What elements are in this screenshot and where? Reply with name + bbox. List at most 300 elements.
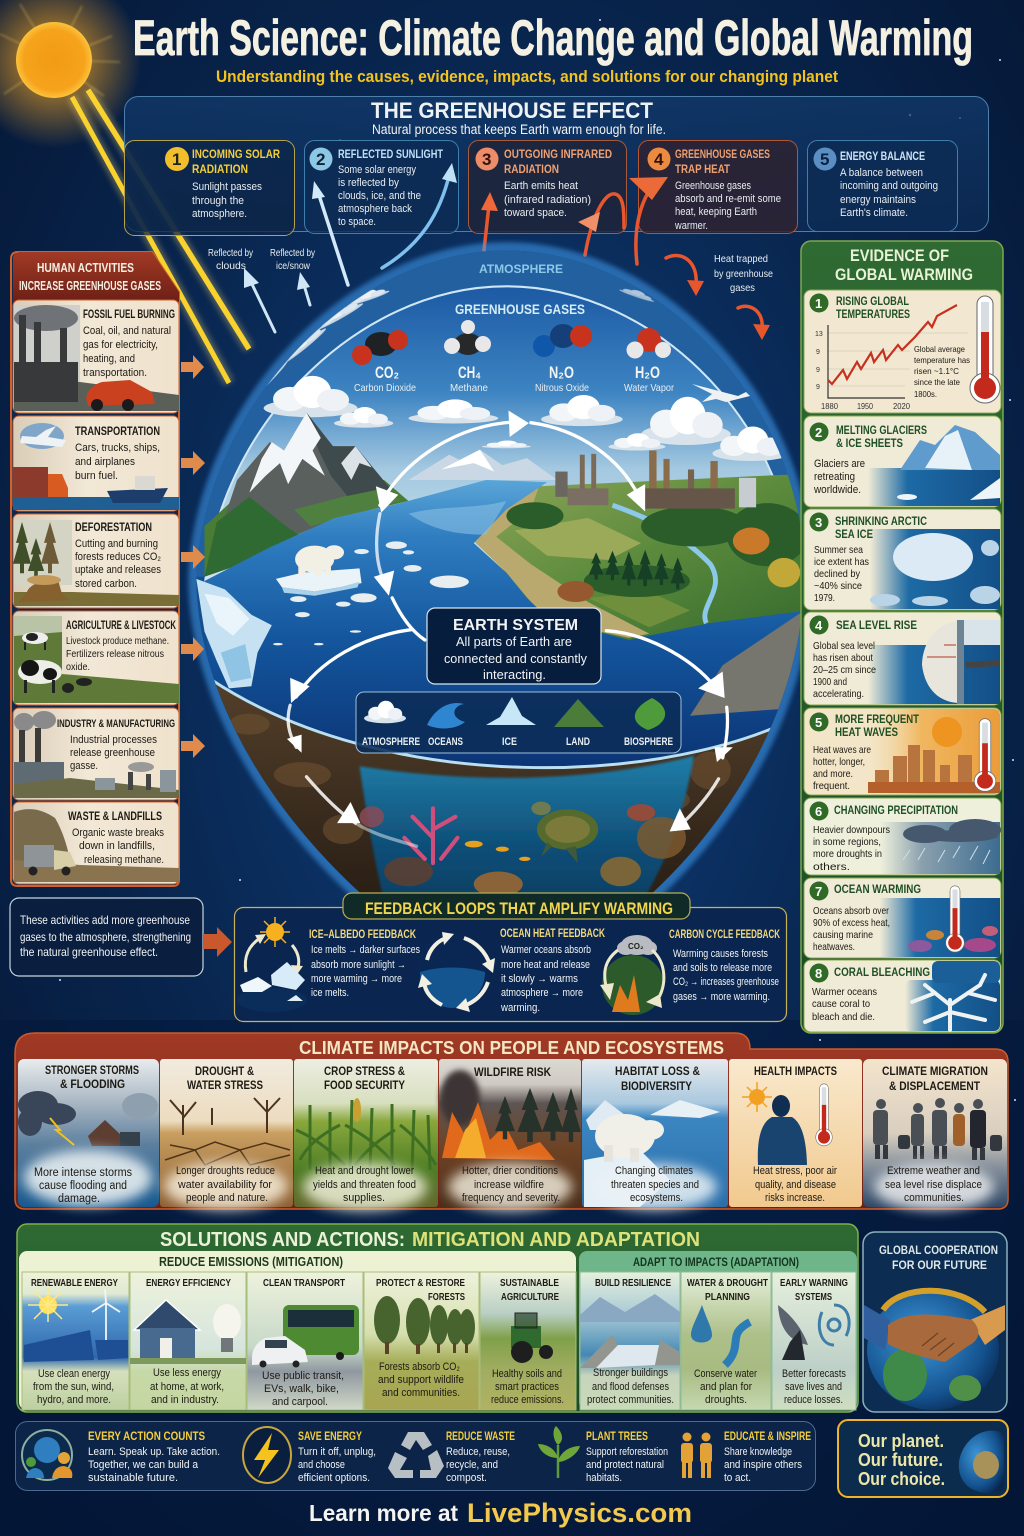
card: sustainable agriculture: Healthy soils and	[492, 1368, 562, 1380]
molecule: methane: CH₄	[458, 363, 481, 382]
card: crop stress and food security: supplies.	[343, 1192, 385, 1204]
panel: global cooperation: FOR OUR FUTURE	[892, 1258, 987, 1272]
card: water and drought planning: PLANNING	[705, 1291, 750, 1303]
card: protect and restore forests: and support wildlife	[378, 1374, 464, 1386]
text: plant trees: Support reforestation	[586, 1446, 668, 1458]
card: melting glaciers: Glaciers are	[814, 458, 865, 470]
chart: temperature line: 1880	[821, 401, 838, 411]
molecule: nitrous oxide	[533, 324, 592, 394]
card: energy efficiency: and in industry.	[151, 1394, 219, 1406]
text: every action counts: Learn. Speak up. Take action.	[88, 1446, 220, 1458]
step 2: reflected sunlight	[310, 147, 444, 228]
card: coral bleaching: CORAL BLEACHING	[834, 967, 930, 979]
legend labels: OCEANS	[428, 736, 463, 748]
card: climate migration and displacement: communities.	[904, 1192, 964, 1204]
card: industry and manufacturing: gasse.	[70, 760, 98, 772]
card: changing precipitation: others.	[813, 861, 850, 873]
step 3: outgoing infrared radiation: RADIATION	[504, 162, 559, 176]
card: more frequent heat waves: MORE FREQUENT	[835, 714, 919, 726]
text: plant trees: and protect natural	[586, 1459, 664, 1471]
card: wildfire risk: frequency and severity.	[462, 1192, 560, 1204]
card: drought and water stress: DROUGHT &	[195, 1064, 254, 1078]
panel: every action counts strip: PLANT TREES	[586, 1429, 648, 1443]
card: build resilience: and flood defenses	[592, 1381, 669, 1393]
text: ice-albedo: more warming → more	[311, 973, 402, 985]
callout: earth system: All parts of Earth are	[456, 635, 572, 649]
step 4: greenhouse gases trap heat: heat, keeping Earth	[675, 206, 757, 218]
labels: reflected and trapped heat: Reflected by	[270, 247, 316, 259]
card: fossil fuel burning: gas for electricity,	[83, 339, 158, 351]
step 5: energy balance: 5	[820, 150, 829, 169]
card: rising global temperatures: 1800s.	[914, 389, 937, 399]
step 5: energy balance	[814, 148, 938, 219]
panel: feedback loops: FEEDBACK LOOPS THAT AMPLIFY WARMING	[365, 899, 673, 918]
text: ocean heat: warming.	[500, 1002, 540, 1014]
card: fossil fuel burning	[13, 300, 179, 413]
card: changing precipitation: 6	[815, 804, 822, 819]
card: agriculture and livestock: Livestock produce methane.	[66, 635, 169, 647]
chart: temperature line: 9	[816, 384, 820, 391]
card: wildfire risk: increase wildfire	[474, 1179, 544, 1191]
card: clean transport: CLEAN TRANSPORT	[263, 1277, 345, 1289]
callout: activities strengthen greenhouse effect: gases to the atmosphere, strengthening	[20, 930, 191, 944]
step 2: reflected sunlight: is reflected by	[338, 177, 399, 189]
card: health impacts: Heat stress, poor air	[753, 1165, 837, 1177]
card: ocean warming: Oceans absorb over	[813, 905, 889, 917]
card: ocean warming: 90% of excess heat,	[813, 917, 890, 929]
molecule: methane: Methane	[450, 382, 488, 394]
card: renewable energy: from the sun, wind,	[33, 1381, 114, 1393]
chart: temperature line: 1950	[857, 401, 873, 411]
card: early warning systems: SYSTEMS	[795, 1291, 832, 1303]
card: shrinking arctic sea ice: SEA ICE	[835, 529, 873, 541]
icon: carbon cycle	[600, 935, 664, 1015]
card: shrinking arctic sea ice: declined by	[814, 568, 861, 580]
card: coral bleaching: 8	[815, 966, 822, 981]
block: adapt to impacts: ADAPT TO IMPACTS (ADAPTATION)	[633, 1255, 799, 1269]
card: renewable energy: hydro, and more.	[37, 1394, 111, 1406]
panel: evidence of global warming: EVIDENCE OF	[850, 247, 949, 265]
chart: temperature line: 9	[816, 367, 820, 374]
card: protect and restore forests: PROTECT & RESTORE	[376, 1277, 465, 1289]
panel: solutions and actions: MITIGATION AND ADAPTATION	[412, 1229, 700, 1251]
arrows: reflected sunlight and infrared	[244, 163, 770, 340]
callout: activities strengthen greenhouse effect: These activities add more greenhouse	[20, 913, 190, 927]
panel: feedback loops: ICE–ALBEDO FEEDBACK	[309, 927, 416, 941]
step 2: reflected sunlight: 2	[316, 150, 325, 169]
chart: temperature line: 13	[815, 331, 823, 338]
molecule: carbon dioxide: Carbon Dioxide	[354, 382, 416, 394]
text: ocean heat	[500, 944, 591, 1014]
card: melting glaciers: & ICE SHEETS	[836, 438, 903, 450]
card: sustainable agriculture: smart practices	[495, 1381, 559, 1393]
card: climate migration and displacement: & DISPLACEMENT	[889, 1079, 981, 1093]
greenhouse gases: molecules: GREENHOUSE GASES	[455, 301, 585, 317]
text: reduce waste	[446, 1446, 510, 1484]
molecule: carbon dioxide: CO₂	[375, 363, 399, 382]
card: renewable energy: Use clean energy	[38, 1368, 110, 1380]
text: ocean heat: more heat and release	[501, 959, 590, 971]
card: habitat loss and biodiversity: ecosystems.	[630, 1192, 683, 1204]
card: rising global temperatures: Global average	[914, 344, 965, 354]
card: waste and landfills: WASTE & LANDFILLS	[68, 811, 162, 823]
block: adapt to impacts	[579, 1251, 857, 1410]
card: early warning systems: Better forecasts	[782, 1368, 846, 1380]
step 4: greenhouse gases trap heat: absorb and re-emit some	[675, 193, 781, 205]
card: more frequent heat waves: 5	[815, 715, 822, 730]
card: agriculture and livestock	[13, 611, 179, 705]
icon: sprout	[538, 1426, 580, 1478]
card: energy efficiency: Use less energy	[153, 1367, 221, 1379]
step 1: incoming solar radiation: RADIATION	[192, 162, 248, 176]
card: rising global temperatures: temperature has	[914, 355, 970, 365]
card: climate migration and displacement: Extreme weather and	[887, 1165, 980, 1177]
text: save energy: Turn it off, unplug,	[298, 1446, 376, 1458]
card: melting glaciers: retreating	[814, 471, 855, 483]
card: drought and water stress: water availability for	[177, 1179, 272, 1191]
arrow: to feedback loops	[203, 927, 232, 957]
card: early warning systems	[772, 1272, 856, 1410]
legend labels: LAND	[566, 736, 590, 748]
panel: evidence of global warming: GLOBAL WARMING	[835, 266, 973, 284]
card: crop stress and food security: yields and threaten food	[313, 1179, 416, 1191]
step 1: incoming solar radiation: 1	[172, 150, 181, 169]
step 4: greenhouse gases trap heat	[648, 147, 781, 232]
card: ocean warming: OCEAN WARMING	[834, 884, 921, 896]
card: health impacts: risks increase.	[765, 1192, 825, 1204]
molecule: water vapor	[624, 328, 674, 394]
text: reduce waste: compost.	[446, 1472, 487, 1484]
step 5: energy balance: Earth's climate.	[840, 207, 908, 219]
icon: small globe	[959, 1431, 1004, 1493]
card: shrinking arctic sea ice: 3	[815, 515, 822, 530]
block: reduce emissions: REDUCE EMISSIONS (MITIGATION)	[159, 1254, 343, 1269]
card: early warning systems: EARLY WARNING	[780, 1277, 848, 1289]
step 3: outgoing infrared radiation: 3	[482, 150, 491, 169]
card: drought and water stress: Longer droughts reduce	[176, 1165, 275, 1177]
card: deforestation	[13, 514, 179, 608]
callout: earth system	[427, 608, 601, 684]
legend: earth system spheres	[356, 692, 681, 753]
card: wildfire risk: Hotter, drier conditions	[462, 1165, 558, 1177]
card: sea level rise: Global sea level	[813, 640, 875, 652]
text: educate and inspire: Share knowledge	[724, 1446, 792, 1458]
card: stronger storms and flooding: & FLOODING	[60, 1077, 125, 1091]
text: every action counts: sustainable future.	[88, 1472, 178, 1484]
footer: learn more	[309, 1498, 692, 1528]
legend labels: BIOSPHERE	[624, 736, 673, 748]
card: early warning systems: save lives and	[785, 1381, 842, 1393]
text: carbon cycle: gases → more warming.	[673, 991, 770, 1003]
card: sustainable agriculture: reduce emissions.	[491, 1394, 564, 1406]
card: fossil fuel burning: Coal, oil, and natural	[83, 325, 171, 337]
callout: our planet: Our future.	[858, 1450, 943, 1470]
text: plant trees	[586, 1446, 668, 1484]
labels: reflected and trapped heat	[208, 247, 773, 294]
text: carbon cycle	[673, 948, 779, 1003]
footer: learn more: LivePhysics.com	[467, 1498, 692, 1528]
panel: every action counts strip: EVERY ACTION COUNTS	[88, 1429, 205, 1443]
card: protect and restore forests: and communities.	[382, 1387, 460, 1399]
card: sea level rise: 20–25 cm since	[813, 664, 876, 676]
card: melting glaciers	[804, 416, 1001, 507]
icon: carbon cycle: CO₂	[628, 942, 644, 951]
step 2: reflected sunlight: REFLECTED SUNLIGHT	[338, 147, 444, 161]
card: build resilience: protect communities.	[587, 1394, 674, 1406]
card: habitat loss and biodiversity: threaten species and	[611, 1179, 699, 1191]
card: waste and landfills: down in landfills,	[79, 840, 155, 852]
card: rising global temperatures: risen ~1.1°C	[914, 366, 959, 376]
card: build resilience: Stronger buildings	[593, 1367, 668, 1379]
footer: learn more: Learn more at	[309, 1500, 458, 1526]
card: renewable energy	[22, 1272, 129, 1410]
text: reduce waste: recycle, and	[446, 1459, 498, 1471]
card: more frequent heat waves: HEAT WAVES	[835, 727, 898, 739]
text: educate and inspire: and inspire others	[724, 1459, 802, 1471]
text: save energy: efficient options.	[298, 1472, 370, 1484]
arrows: activities into atmosphere	[181, 355, 205, 758]
card: clean transport	[247, 1272, 363, 1410]
sun	[0, 0, 142, 148]
card: sustainable agriculture: SUSTAINABLE	[500, 1277, 559, 1289]
panel: feedback loops: OCEAN HEAT FEEDBACK	[500, 926, 605, 940]
card: rising global temperatures: TEMPERATURES	[836, 309, 910, 321]
card: drought and water stress: WATER STRESS	[187, 1078, 263, 1092]
labels: reflected and trapped heat: clouds	[216, 260, 246, 272]
card: coral bleaching	[804, 960, 1001, 1032]
card: fossil fuel burning: heating, and	[83, 353, 135, 365]
chart: temperature line: 2020	[893, 401, 910, 411]
panel: climate impacts: CLIMATE IMPACTS ON PEOPLE AND ECOSYSTEMS	[299, 1038, 724, 1058]
card: melting glaciers: 2	[815, 425, 822, 440]
text: every action counts	[88, 1446, 220, 1484]
card: clean transport: and carpool.	[272, 1396, 328, 1408]
step 2: reflected sunlight: to space.	[338, 216, 376, 228]
callout: earth system: connected and constantly	[444, 652, 588, 666]
card: more frequent heat waves: hotter, longer,	[813, 756, 865, 768]
card: melting glaciers: worldwide.	[813, 484, 861, 496]
card: agriculture and livestock: AGRICULTURE & LIVESTOCK	[66, 620, 176, 632]
card: more frequent heat waves	[804, 708, 1001, 795]
card: changing precipitation: more droughts in	[813, 848, 882, 860]
card: build resilience	[580, 1272, 680, 1410]
card: transportation: and airplanes	[75, 456, 135, 468]
card: sea level rise	[804, 612, 1001, 705]
icon: ocean heat cycle	[418, 932, 495, 1012]
card: deforestation: uptake and releases	[75, 564, 161, 576]
molecule: carbon dioxide	[352, 330, 416, 394]
text: reduce waste: Reduce, reuse,	[446, 1446, 510, 1458]
callout: activities strengthen greenhouse effect	[10, 898, 203, 976]
legend labels	[362, 736, 673, 748]
step 2: reflected sunlight: Some solar energy	[338, 164, 416, 176]
card: crop stress and food security	[294, 1059, 438, 1211]
legend labels: ICE	[502, 736, 517, 748]
heading: the greenhouse effect	[371, 98, 666, 137]
text: save energy	[298, 1446, 376, 1484]
icon: land	[554, 699, 604, 727]
callout: earth system: interacting.	[483, 668, 546, 682]
molecule: water vapor: Water Vapor	[624, 382, 674, 394]
card: renewable energy: RENEWABLE ENERGY	[31, 1277, 118, 1289]
card: crop stress and food security: FOOD SECURITY	[324, 1078, 405, 1092]
card: stronger storms and flooding	[18, 1059, 159, 1207]
step 4: greenhouse gases trap heat: 4	[654, 150, 664, 169]
card: sea level rise: 4	[815, 618, 823, 633]
callout: activities strengthen greenhouse effect: the natural greenhouse effect.	[20, 945, 158, 959]
card: agriculture and livestock: Fertilizers release nitrous	[66, 648, 164, 660]
card: ocean warming: heatwaves.	[813, 941, 855, 953]
labels: reflected and trapped heat: ice/snow	[276, 260, 310, 272]
labels: reflected and trapped heat: Reflected by	[208, 247, 254, 259]
panel: human activities	[11, 252, 179, 886]
card: protect and restore forests: Forests absorb CO₂	[379, 1361, 460, 1373]
card: transportation: TRANSPORTATION	[75, 424, 160, 438]
card: sea level rise: accelerating.	[813, 688, 864, 700]
card: health impacts: HEALTH IMPACTS	[754, 1064, 837, 1078]
block: reduce emissions	[19, 1251, 576, 1410]
card: drought and water stress: people and nature.	[186, 1192, 268, 1204]
text: carbon cycle: and soils to release more	[673, 962, 772, 974]
step 3: outgoing infrared radiation: OUTGOING INFRARED	[504, 147, 612, 161]
card: coral bleaching: cause coral to	[812, 998, 870, 1010]
card: waste and landfills	[13, 802, 179, 884]
card: ocean warming: 7	[815, 884, 822, 899]
icon: oceans	[427, 703, 465, 728]
card: deforestation: DEFORESTATION	[75, 520, 152, 534]
card: changing precipitation: in some regions,	[813, 836, 881, 848]
card: fossil fuel burning: transportation.	[83, 367, 147, 379]
subtitle: Understanding the causes, evidence, impacts, and solutions for our changing planet	[216, 67, 838, 86]
callout: our planet: Our planet.	[858, 1431, 944, 1451]
card: stronger storms and flooding: cause flooding and	[39, 1180, 127, 1192]
card: coral bleaching: bleach and die.	[812, 1011, 875, 1023]
text: carbon cycle: CO₂ → increases greenhouse	[673, 976, 779, 988]
labels: reflected and trapped heat: Heat trapped	[714, 253, 768, 265]
card: water and drought planning: WATER & DROUGHT	[687, 1277, 768, 1289]
card: energy efficiency: at home, at work,	[150, 1381, 224, 1393]
card: habitat loss and biodiversity: Changing climates	[615, 1165, 693, 1177]
atmosphere label: ATMOSPHERE	[479, 262, 563, 276]
step 1: incoming solar radiation: INCOMING SOLAR	[192, 147, 280, 161]
step 4: greenhouse gases trap heat: Greenhouse gases	[675, 180, 751, 192]
step 1: incoming solar radiation	[165, 147, 280, 220]
step 1: incoming solar radiation: through the	[192, 195, 244, 207]
step 5: energy balance: energy maintains	[840, 194, 916, 206]
panel: every action counts strip	[16, 1422, 816, 1490]
step 3: outgoing infrared radiation	[476, 147, 612, 219]
card: transportation: burn fuel.	[75, 470, 118, 482]
text: plant trees: habitats.	[586, 1472, 622, 1484]
card: energy efficiency	[130, 1272, 246, 1410]
card: habitat loss and biodiversity	[582, 1059, 728, 1210]
card: stronger storms and flooding: STRONGER STORMS	[45, 1063, 139, 1077]
panel: feedback loops	[234, 893, 786, 1022]
text: educate and inspire: to act.	[724, 1472, 751, 1484]
card: water and drought planning: Conserve water	[694, 1368, 757, 1380]
card: shrinking arctic sea ice: Summer sea	[814, 544, 863, 556]
labels: reflected and trapped heat: by greenhouse	[714, 268, 773, 280]
card: deforestation: forests reduces CO₂	[75, 551, 161, 563]
greenhouse gases: molecules	[352, 301, 674, 394]
card: water and drought planning	[681, 1272, 771, 1410]
heading: the greenhouse effect: THE GREENHOUSE EFFECT	[371, 98, 654, 123]
card: transportation	[13, 416, 179, 511]
card: crop stress and food security: CROP STRESS &	[324, 1064, 405, 1078]
card: shrinking arctic sea ice: SHRINKING ARCTIC	[835, 516, 927, 528]
heading: the greenhouse effect: Natural process that keeps Earth warm enough for life.	[372, 122, 666, 137]
card: ocean warming	[804, 878, 1001, 958]
panel: every action counts strip: SAVE ENERGY	[298, 1429, 362, 1443]
incoming sunlight beams	[72, 90, 249, 383]
text: every action counts: Together, we can build a	[88, 1459, 199, 1471]
card: more frequent heat waves: and more.	[813, 768, 853, 780]
step 3: outgoing infrared radiation: Earth emits heat	[504, 180, 578, 192]
step 3: outgoing infrared radiation: (infrared radiation)	[504, 194, 591, 206]
icon: recycle	[388, 1432, 444, 1478]
step 5: energy balance: ENERGY BALANCE	[840, 149, 925, 163]
molecule: nitrous oxide: Nitrous Oxide	[535, 382, 589, 394]
card: clean transport: EVs, walk, bike,	[264, 1383, 339, 1395]
panel: human activities: INCREASE GREENHOUSE GASES	[19, 279, 161, 293]
card: more frequent heat waves: Heat waves are	[813, 744, 871, 756]
chart: temperature line	[815, 305, 968, 411]
icon: ice-albedo	[237, 917, 307, 1012]
card: clean transport: Use public transit,	[262, 1370, 344, 1382]
text: ice-albedo: Ice melts → darker surfaces	[311, 944, 420, 956]
panel: climate impacts	[15, 1033, 1008, 1211]
icon: people around globe	[22, 1430, 72, 1480]
text: ice-albedo: absorb more sunlight →	[311, 959, 406, 971]
text: educate and inspire	[724, 1446, 802, 1484]
icon: biosphere	[635, 698, 665, 730]
step 4: greenhouse gases trap heat: GREENHOUSE GASES	[675, 147, 770, 161]
card: rising global temperatures: since the late	[914, 377, 960, 387]
card: melting glaciers: MELTING GLACIERS	[836, 425, 927, 437]
icon: lightning	[243, 1427, 291, 1483]
icon: ice	[486, 697, 536, 725]
card: changing precipitation: CHANGING PRECIPITATION	[834, 805, 958, 817]
text: carbon cycle: Warming causes forests	[673, 948, 768, 960]
panel: global cooperation: GLOBAL COOPERATION	[879, 1243, 998, 1257]
card: more frequent heat waves: frequent.	[813, 780, 850, 792]
icon: globe with handshake	[864, 1290, 1005, 1410]
panel: global cooperation	[863, 1232, 1007, 1412]
card: industry and manufacturing: INDUSTRY & MANUFACTURING	[57, 718, 175, 730]
card: energy efficiency: ENERGY EFFICIENCY	[146, 1277, 231, 1289]
step 5: energy balance: A balance between	[840, 167, 923, 179]
card: habitat loss and biodiversity: BIODIVERSITY	[621, 1079, 692, 1093]
panel background: the greenhouse effect	[124, 96, 988, 236]
card: water and drought planning: and plan for	[700, 1381, 752, 1393]
card: wildfire risk: WILDFIRE RISK	[474, 1065, 551, 1079]
step 4: greenhouse gases trap heat: warmer.	[674, 220, 708, 232]
callout: earth system: EARTH SYSTEM	[453, 617, 578, 634]
card: agriculture and livestock: oxide.	[66, 661, 90, 673]
card: transportation: Cars, trucks, ships,	[75, 442, 160, 454]
text: save energy: and choose	[298, 1459, 345, 1471]
chart: temperature line: 9	[816, 349, 820, 356]
text: ocean heat: atmosphere → more	[501, 987, 583, 999]
icon: atmosphere	[364, 701, 406, 723]
card: ocean warming: causing marine	[813, 929, 873, 941]
callout: our planet	[838, 1420, 1008, 1497]
text: ocean heat: it slowly → warms	[501, 973, 578, 985]
card: waste and landfills: Organic waste breaks	[72, 827, 164, 839]
card: water and drought planning: droughts.	[705, 1394, 747, 1406]
panel: every action counts strip: REDUCE WASTE	[446, 1429, 515, 1443]
card: stronger storms and flooding: damage.	[58, 1193, 100, 1205]
